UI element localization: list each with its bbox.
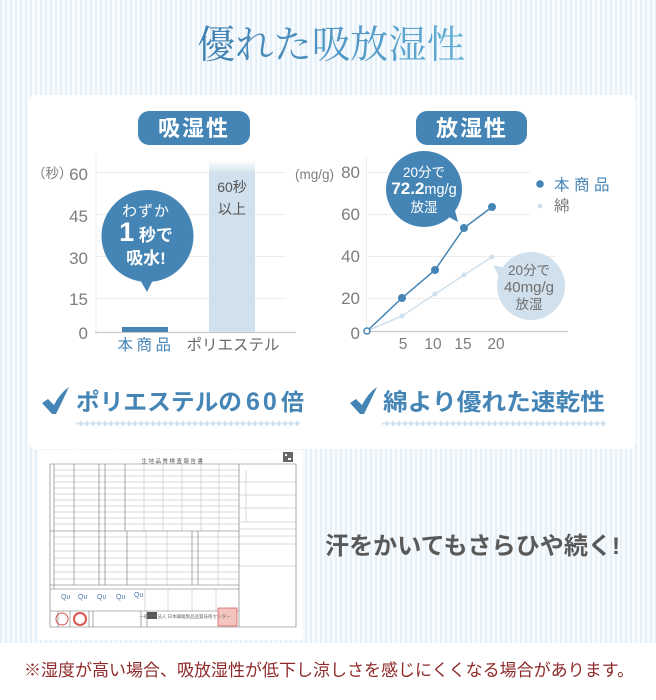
document stamps and small text (56, 592, 237, 626)
document stamps and small text: Qυ (78, 594, 87, 601)
bar chart: 吸湿性 (32, 156, 296, 354)
document stamps and small text: 一般財団法人 日本繊維製品品質技術センター (139, 613, 231, 620)
bar label: 60秒以上: 以上 (218, 201, 246, 217)
line chart: 放湿性 (295, 151, 614, 353)
heading pill: 放湿性: 放湿性 (436, 116, 508, 141)
callout: わずか1秒で吸水!: わずか (122, 203, 170, 220)
bar chart: 吸湿性: 60 (69, 165, 88, 184)
line chart: 放湿性: 80 (341, 163, 360, 182)
document stamps and small text: Qυ (97, 594, 106, 601)
line chart: 放湿性: 0 (351, 324, 360, 343)
result: 綿より優れた速乾性 (350, 387, 606, 427)
result: ポリエステルの60倍: ポリエステルの (76, 389, 242, 415)
callout: 20分で40mg/g放湿 (493, 252, 565, 320)
bar chart: 吸湿性: 0 (79, 324, 88, 343)
legend: 綿 (554, 197, 570, 215)
callout: 20分で40mg/g放湿: 20分で (508, 263, 550, 278)
line chart: 放湿性: 40 (341, 247, 360, 266)
line chart: 放湿性: 15 (454, 336, 472, 353)
bar chart: 吸湿性: 30 (69, 249, 88, 268)
bar: 本商品 (122, 327, 168, 332)
callout: 20分で72.2mg/g放湿: 72.2mg/g (391, 179, 457, 198)
title: 優れた吸放湿性 (197, 24, 465, 67)
heading pill: 放湿性 (416, 111, 527, 145)
heading pill: 吸湿性: 吸湿性 (158, 116, 230, 141)
document stamps and small text: Qυ (116, 594, 125, 601)
report table (50, 464, 296, 627)
document heading: 生地品質検査報告書 (141, 457, 205, 465)
panel: test report document (38, 450, 302, 640)
icon: check mark (42, 387, 69, 414)
bar: ポリエステル (209, 160, 255, 332)
callout: わずか1秒で吸水!: 吸水! (126, 249, 166, 268)
document stamps and small text: Qυ (134, 592, 143, 599)
bar label: 60秒以上 (217, 179, 247, 217)
line chart: 放湿性: (mg/g) (295, 167, 334, 182)
callout: 20分で40mg/g放湿: 放湿 (516, 297, 542, 312)
legend (536, 176, 614, 215)
bar label: 60秒以上: 60秒 (217, 179, 247, 195)
result: ポリエステルの60倍 (42, 387, 304, 427)
heading pill: 吸湿性 (138, 111, 250, 145)
caption: 汗をかいてもさらひや続く!: 汗をかいてもさらひや続く! (325, 533, 620, 560)
line series: 本商品 (364, 203, 496, 334)
line chart: 放湿性: 60 (341, 205, 360, 224)
callout: 20分で40mg/g放湿: 40mg/g (504, 279, 554, 296)
callout: 20分で72.2mg/g放湿: 放湿 (410, 200, 438, 215)
x label: 本商品: 本商品 (117, 336, 175, 354)
result: 綿より優れた速乾性: 綿より優れた速乾性 (383, 389, 605, 415)
icon: QR code (283, 452, 293, 462)
callout: 20分で72.2mg/g放湿: 20分で (403, 165, 445, 180)
line chart: 放湿性: 20 (341, 289, 360, 308)
bar chart: 吸湿性: （秒） (32, 166, 72, 181)
bar chart: 吸湿性: 45 (69, 207, 88, 226)
legend: 本商品 (554, 176, 614, 194)
result: ポリエステルの60倍: 倍 (281, 389, 304, 415)
panel: white card with charts (28, 95, 636, 449)
icon: check mark (350, 387, 377, 414)
bar chart: 吸湿性: 15 (69, 290, 88, 309)
x label: ポリエステル: ポリエステル (186, 336, 280, 354)
footnote: ※湿度が高い場合、吸放湿性が低下し涼しさを感じにくくなる場合があります。 (24, 661, 634, 680)
line chart: 放湿性: 20 (487, 336, 505, 353)
callout: わずか1秒で吸水! (102, 190, 194, 292)
line chart: 放湿性: 10 (424, 336, 442, 353)
callout: 20分で72.2mg/g放湿 (386, 151, 462, 227)
line chart: 放湿性: 5 (399, 336, 407, 353)
line series: 綿 (367, 254, 494, 331)
document stamps and small text: Qυ (61, 594, 70, 601)
result: ポリエステルの60倍: 60 (246, 388, 280, 416)
callout: わずか1秒で吸水!: 1 秒で (119, 217, 173, 247)
